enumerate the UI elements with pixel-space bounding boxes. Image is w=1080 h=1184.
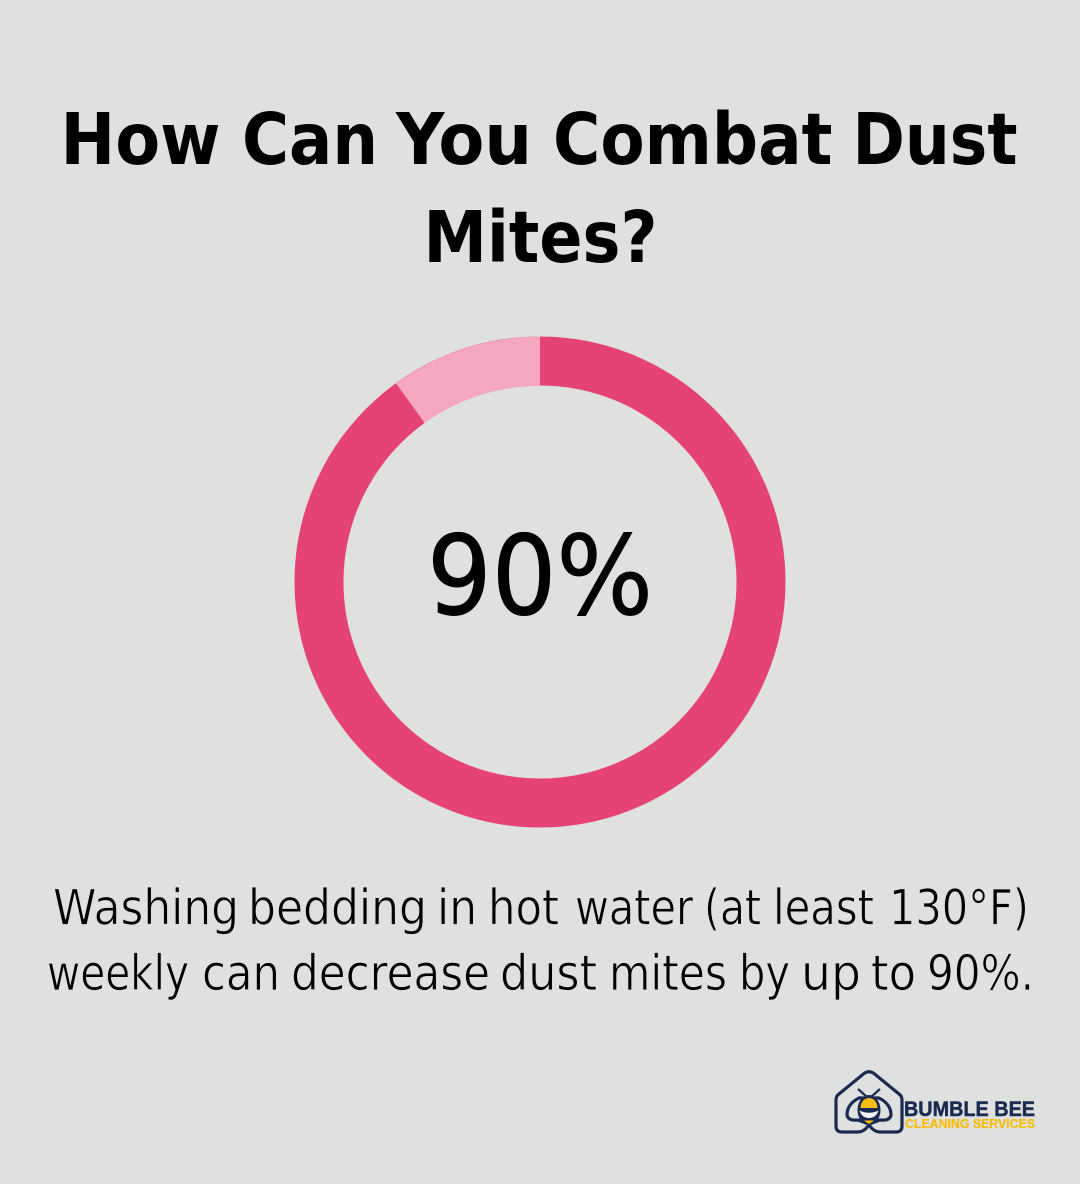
description text: dust <box>500 945 597 1002</box>
description text: hot <box>488 880 559 936</box>
icon: house outline with bee <box>836 1072 902 1132</box>
description text: water <box>575 880 694 936</box>
donut chart: 90% <box>319 336 761 803</box>
logo: Bumble Bee Cleaning Services <box>836 1072 1035 1132</box>
description text: weekly <box>47 945 189 1002</box>
title: Combat <box>553 98 832 181</box>
description text: (at <box>704 880 761 936</box>
description text: 90%. <box>927 945 1034 1002</box>
title <box>60 98 1018 279</box>
description text: Washing <box>53 880 239 936</box>
description text: in <box>437 880 477 936</box>
description text: 130°F) <box>889 880 1029 936</box>
description text: mites <box>609 945 727 1002</box>
description text: to <box>871 945 916 1002</box>
donut remaining segment: 10% <box>396 336 540 423</box>
description text <box>47 880 1034 1002</box>
title: How <box>60 98 220 181</box>
title: Dust <box>852 98 1018 181</box>
description text: decrease <box>291 945 490 1002</box>
title: You <box>395 98 532 181</box>
logo name: BUMBLE BEE <box>904 1098 1035 1121</box>
logo tagline: CLEANING SERVICES <box>905 1117 1035 1131</box>
description text: bedding <box>248 880 427 936</box>
description text: can <box>202 945 280 1002</box>
title: Mites? <box>424 196 658 279</box>
description text: by <box>739 945 790 1002</box>
description text: least <box>773 880 874 936</box>
title: Can <box>242 98 378 181</box>
donut value: 90% <box>427 512 653 640</box>
description text: up <box>801 945 861 1002</box>
